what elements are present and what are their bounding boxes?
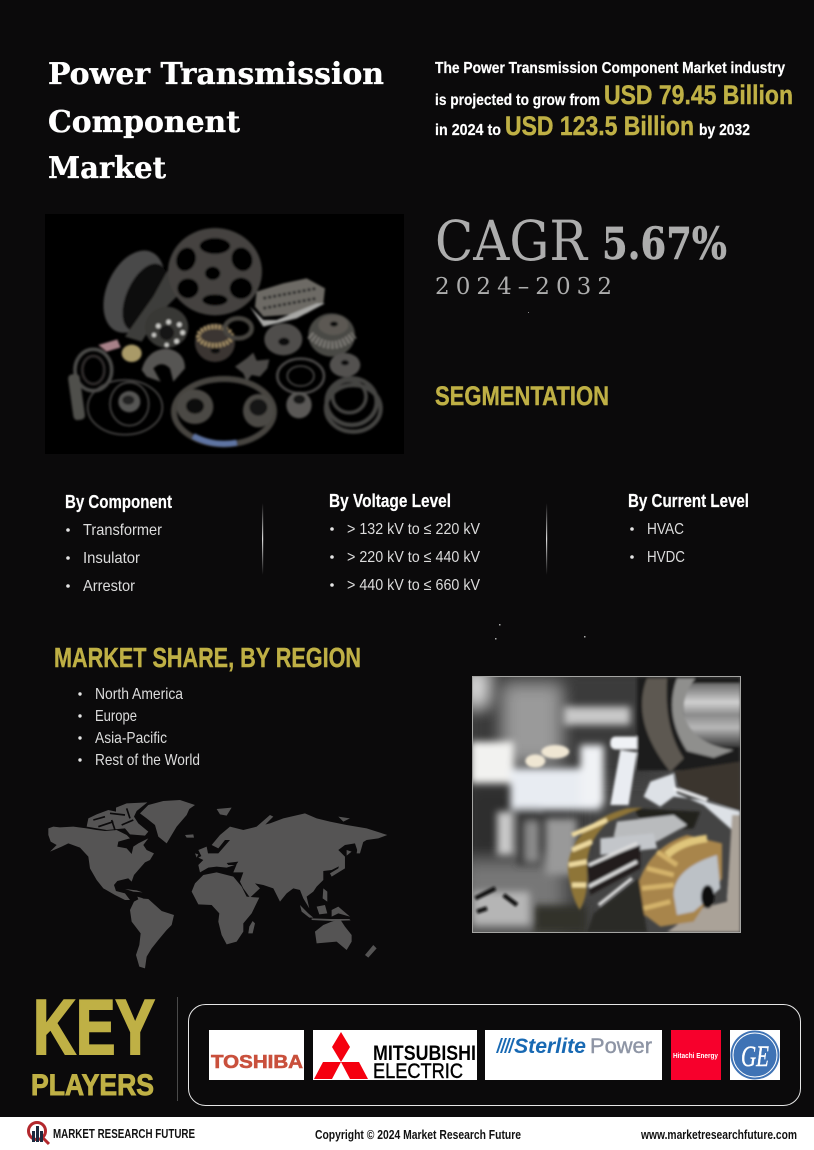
segment: by voltage level: > 132 kV to ≤ 220 kV <box>347 521 480 538</box>
title <box>48 57 384 186</box>
Cuba and Caribbean <box>125 889 143 899</box>
Madagascar <box>248 921 255 933</box>
market growth statement: by 2032 <box>699 122 750 139</box>
icon: large pulley <box>168 228 262 315</box>
heading: market share by region: MARKET SHARE, BY REGION <box>54 642 361 673</box>
icon: thin O-rings <box>88 359 324 435</box>
icon: flange with bolts <box>145 307 188 348</box>
Sakhalin and Kamchatka <box>357 842 363 853</box>
list: regions: North America <box>95 686 183 703</box>
segment: by component: Insulator <box>83 550 141 567</box>
segment: by voltage level <box>329 491 480 594</box>
heading: key players <box>31 983 155 1102</box>
market growth statement: USD 123.5 Billion <box>505 111 694 141</box>
icon: bronze gear <box>195 323 235 362</box>
segment: by current level: HVDC <box>647 549 685 566</box>
CAGR figure <box>435 209 727 300</box>
North America <box>48 827 154 900</box>
list: regions: Rest of the World <box>95 752 200 769</box>
icon: small hub <box>286 392 312 418</box>
logo: Mitsubishi Electric: MITSUBISHI <box>373 1042 476 1065</box>
icon: half coupling <box>142 348 185 382</box>
CAGR figure: 5.67% <box>602 219 727 270</box>
Australia <box>315 919 352 950</box>
icon: jaw coupling spider <box>225 318 269 382</box>
logo: Sterlite Power: Power <box>590 1035 652 1058</box>
list: regions: Europe <box>95 708 137 725</box>
logo: Sterlite Power <box>485 1030 662 1080</box>
Canadian Arctic <box>87 802 148 836</box>
list: regions: Asia-Pacific <box>95 730 167 747</box>
Southeast Asia and Indonesia <box>300 888 351 921</box>
New Zealand <box>365 945 377 958</box>
segment: by component <box>65 492 172 595</box>
icon: shoe and clip <box>68 339 142 421</box>
icon: sprocket stack <box>308 313 355 357</box>
heading: segmentation: SEGMENTATION <box>435 381 609 411</box>
segment: by voltage level: > 220 kV to ≤ 440 kV <box>347 549 480 566</box>
Greenland <box>140 800 195 843</box>
icon: small sleeve <box>118 391 140 412</box>
Eurasia <box>198 813 387 908</box>
world map <box>48 800 387 968</box>
CAGR figure: 2024–2032 <box>435 274 612 300</box>
logo: Sterlite Power: Sterlite <box>514 1035 586 1058</box>
logo: Hitachi Energy: Hitachi Energy <box>673 1053 718 1060</box>
icon: stacked V-belts <box>326 378 381 432</box>
segment: by component: Transformer <box>83 522 163 539</box>
list: regions <box>78 686 200 769</box>
title: Power Transmission <box>48 57 384 92</box>
logo: GE <box>730 1030 780 1080</box>
segment: by current level: HVAC <box>647 521 684 538</box>
logo: Hitachi Energy <box>671 1030 721 1080</box>
segment: by current level <box>628 491 749 566</box>
Africa <box>192 872 259 944</box>
heading: key players: PLAYERS <box>31 1069 154 1102</box>
panel: key player logos <box>188 1004 800 1106</box>
segment: by voltage level: > 440 kV to ≤ 660 kV <box>347 577 480 594</box>
Arctic islands <box>217 808 350 827</box>
market growth statement <box>435 60 793 141</box>
segment: by current level: By Current Level <box>628 491 749 511</box>
Black Sea <box>227 862 238 865</box>
South America <box>130 898 174 968</box>
Iceland <box>185 834 194 838</box>
logo: Mitsubishi Electric: ELECTRIC <box>373 1060 463 1083</box>
image: power transmission components <box>45 214 404 454</box>
icon: roller chain <box>250 278 325 327</box>
segment: by component: By Component <box>65 492 172 512</box>
segment: by component: Arrestor <box>83 578 136 595</box>
Japan <box>330 850 352 877</box>
logo: Market Research Future <box>28 1122 195 1144</box>
segment: by voltage level: By Voltage Level <box>329 491 451 511</box>
footer <box>0 1117 814 1150</box>
heading: key players: KEY <box>33 983 155 1071</box>
CAGR figure: CAGR <box>435 209 588 273</box>
title: Market <box>48 151 166 186</box>
market growth statement: is projected to grow from <box>435 92 600 109</box>
icon: coupling hub <box>264 323 302 355</box>
photo: gearbox close-up <box>464 668 741 933</box>
copyright: Copyright © 2024 Market Research Future <box>315 1127 521 1142</box>
icon: wide belt <box>91 241 177 342</box>
title: Component <box>48 105 240 140</box>
Great Britain <box>195 847 208 858</box>
logo: Market Research Future: MARKET RESEARCH FUTURE <box>53 1126 195 1141</box>
icon: hub right <box>330 353 360 377</box>
logo: Toshiba: TOSHIBA <box>211 1052 303 1072</box>
logo: GE: GE <box>741 1040 769 1073</box>
logo: Mitsubishi Electric <box>313 1030 477 1083</box>
market growth statement: in 2024 to <box>435 122 501 139</box>
icon: timing belt with pulleys <box>174 379 274 444</box>
logo: Toshiba <box>209 1030 304 1080</box>
